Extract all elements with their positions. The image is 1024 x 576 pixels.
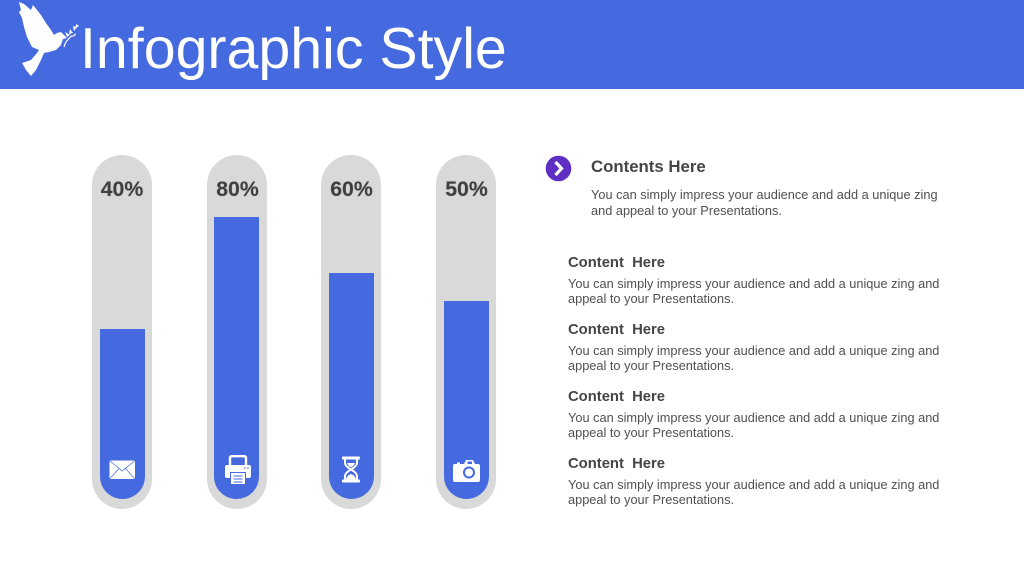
text block: content 4: Content Here bbox=[568, 456, 665, 472]
text block: content 1: appeal to your Presentations. bbox=[568, 291, 734, 306]
text block: content 1: Content Here bbox=[568, 255, 665, 271]
text block: content 2: You can simply impress your audience and add a unique zing and bbox=[568, 343, 939, 358]
heading block: contents here: You can simply impress your audience and add a unique zing bbox=[591, 187, 938, 202]
heading block: contents here: Contents Here bbox=[591, 157, 706, 176]
chart: bar 80%: 80% bbox=[216, 177, 259, 201]
chart: bar 60% bbox=[321, 155, 381, 509]
heading block: contents here bbox=[591, 157, 938, 218]
text block: content 3: You can simply impress your audience and add a unique zing and bbox=[568, 410, 939, 425]
header band bbox=[0, 0, 1024, 89]
chart: bar 60%: 60% bbox=[330, 177, 373, 201]
text block: content 3: Content Here bbox=[568, 389, 665, 405]
text block: content 3: appeal to your Presentations. bbox=[568, 425, 734, 440]
text block: content 4: appeal to your Presentations. bbox=[568, 492, 734, 507]
chart: bar 80% bbox=[207, 155, 267, 509]
text block: content 2 bbox=[568, 322, 939, 373]
text block: content 1: You can simply impress your audience and add a unique zing and bbox=[568, 276, 939, 291]
text block: content 2: appeal to your Presentations. bbox=[568, 358, 734, 373]
chart: bar 40% bbox=[92, 155, 152, 509]
heading block: contents here: and appeal to your Presentations. bbox=[591, 203, 782, 218]
icon: envelope bbox=[110, 460, 135, 479]
text block: content 1 bbox=[568, 255, 939, 306]
icon: printer bbox=[225, 455, 251, 484]
title: Infographic Style bbox=[80, 17, 507, 81]
icon: camera bbox=[453, 460, 480, 482]
text block: content 3 bbox=[568, 389, 939, 440]
chart: bar 50% bbox=[436, 155, 496, 509]
chart: bar 40%: 40% bbox=[101, 177, 143, 201]
icon: dove bbox=[19, 2, 79, 76]
icon: hourglass bbox=[342, 456, 360, 482]
text block: content 4 bbox=[568, 456, 939, 507]
text block: content 4: You can simply impress your audience and add a unique zing and bbox=[568, 477, 939, 492]
chart: bar 50%: 50% bbox=[445, 177, 488, 201]
text block: content 2: Content Here bbox=[568, 322, 665, 338]
icon: purple chevron bullet bbox=[546, 156, 572, 182]
